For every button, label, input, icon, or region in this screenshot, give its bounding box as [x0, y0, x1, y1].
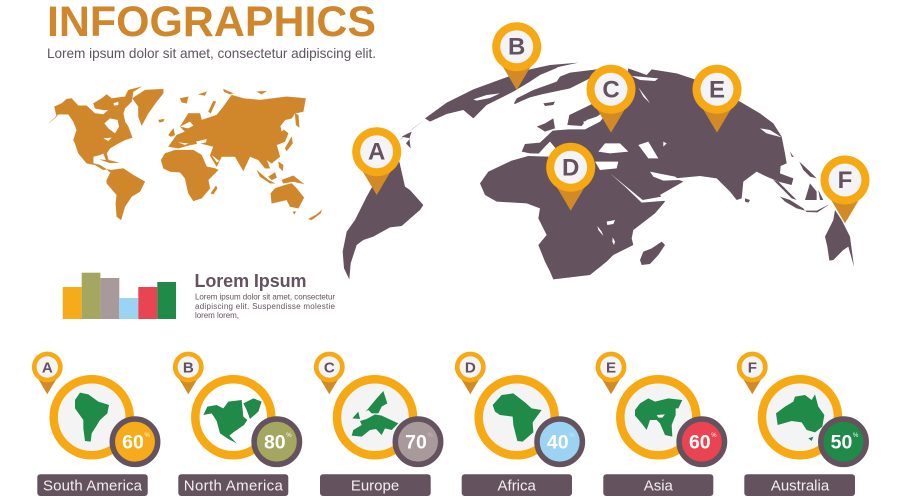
- panel: South America: [32, 352, 158, 496]
- map pin D: [546, 143, 595, 211]
- panel: Australia: %: [853, 433, 859, 439]
- map pin D: D: [562, 154, 579, 181]
- panel: Australia: 50: [831, 432, 852, 454]
- panel: Europe: 70: [405, 432, 427, 454]
- panel: North America: %: [286, 433, 292, 439]
- panel: Europe: %: [428, 433, 434, 439]
- panel: North America: North America: [184, 478, 283, 494]
- panel: South America: %: [144, 433, 150, 439]
- icon: North America silhouette: [203, 398, 262, 443]
- map pin A: A: [368, 139, 385, 166]
- text block: Lorem Ipsum: Lorem Ipsum: [194, 271, 306, 291]
- icon: Australia silhouette: [776, 394, 824, 441]
- small world map: [49, 87, 322, 220]
- panel: Africa: [455, 352, 582, 496]
- panel: North America: B: [183, 359, 194, 376]
- panel: Australia: Australia: [771, 478, 830, 494]
- text block: Lorem Ipsum: [194, 271, 336, 320]
- bar chart: [63, 273, 176, 319]
- map pin C: C: [602, 76, 620, 103]
- panel: Asia: [596, 352, 724, 496]
- panel: Australia: [737, 352, 866, 496]
- icon: South America silhouette: [75, 393, 109, 442]
- map pin E: E: [709, 76, 725, 103]
- text block: Lorem Ipsum: Lorem ipsum dolor sit amet, consectetur: [195, 292, 335, 302]
- map pin A: [352, 127, 401, 195]
- panel: Africa: D: [465, 359, 476, 376]
- panel: South America: South America: [43, 478, 143, 494]
- panel: Africa: Africa: [498, 478, 537, 494]
- panel: South America: A: [42, 359, 53, 376]
- subtitle: Lorem ipsum dolor sit amet, consectetur adipiscing elit.: [47, 46, 376, 61]
- panel: North America: [173, 352, 300, 496]
- panel: South America: 60: [122, 432, 144, 454]
- text block: Lorem Ipsum: lorem lorem,: [195, 311, 239, 320]
- panel: Europe: Europe: [351, 478, 399, 494]
- panel: Europe: [314, 352, 441, 496]
- map pin B: B: [508, 34, 525, 61]
- panel: Africa: %: [569, 433, 575, 439]
- map pin F: F: [838, 167, 852, 194]
- panel: Europe: C: [324, 359, 335, 376]
- panel: Australia: F: [748, 359, 757, 376]
- icon: Africa silhouette: [493, 393, 542, 442]
- icon: Asia silhouette: [635, 398, 682, 437]
- map pin F: [820, 156, 870, 223]
- text block: Lorem Ipsum: adipiscing elit. Suspendisse molestie: [195, 302, 336, 311]
- icon: Europe silhouette: [352, 391, 398, 437]
- large globe map: [343, 63, 854, 279]
- panel: Asia: %: [711, 433, 717, 439]
- panel: North America: 80: [264, 432, 286, 454]
- map pin E: [692, 65, 742, 133]
- map pin C: [586, 65, 636, 133]
- panel: Asia: 60: [689, 432, 711, 454]
- map pin B: [492, 22, 541, 90]
- panel: Asia: E: [606, 359, 616, 376]
- panel: Asia: Asia: [644, 478, 674, 494]
- panel: Africa: 40: [547, 432, 569, 454]
